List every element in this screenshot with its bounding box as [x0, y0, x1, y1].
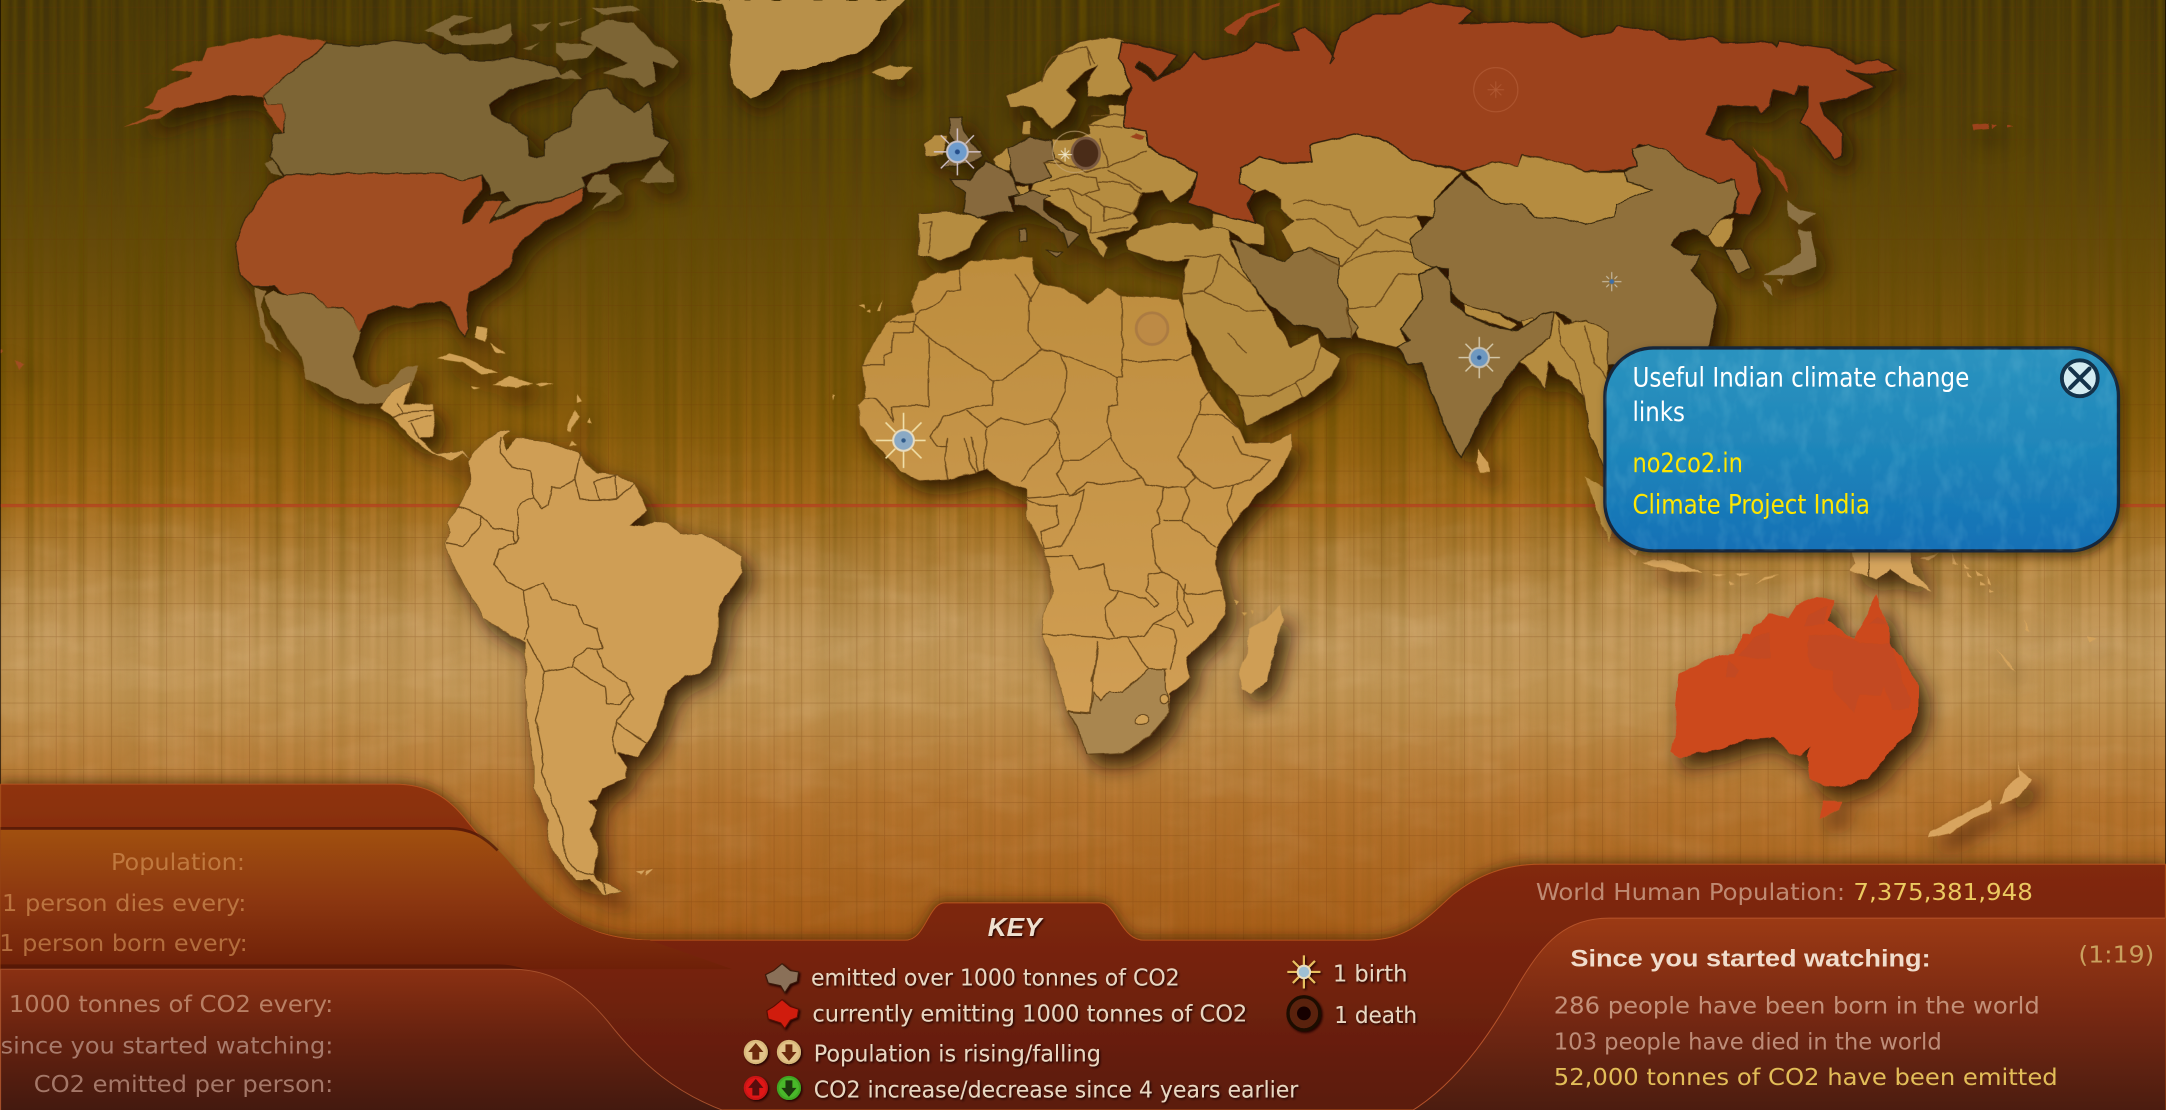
CO2 labels: CO2 emitted per person: [34, 1070, 333, 1098]
Tasmania [1820, 801, 1842, 818]
Russia [1119, 3, 1896, 224]
India [1398, 266, 1554, 457]
Sri Lanka [1476, 450, 1489, 472]
popup: Indian climate change links: links [1632, 398, 1685, 428]
birth marker: West Africa [876, 413, 926, 468]
European and Asian borders [923, 47, 1416, 397]
faded death marker: Egypt [1136, 313, 1168, 344]
Turkey and Arabia [1126, 223, 1340, 425]
key: emitted over 1000 tonnes: emitted over 1000 tonnes of CO2 [811, 964, 1180, 992]
Benelux and Denmark [992, 120, 1030, 195]
China [1410, 144, 1737, 367]
birth marker: India [1459, 337, 1500, 378]
bottom panel: background layer [1, 784, 2165, 1110]
right panel: world population: 7,375,381,948 [1853, 878, 2033, 906]
births count: 286 people have been born in the world [1554, 991, 2040, 1019]
Caucasus [1213, 213, 1265, 245]
France [950, 162, 1019, 218]
popup: Indian climate change links [1605, 348, 2118, 551]
popup heading: Useful Indian climate change [1632, 364, 1969, 394]
Iran [1231, 240, 1358, 338]
left panel: population [0, 828, 732, 969]
United Kingdom [943, 117, 983, 167]
world map [1, 0, 2097, 895]
South American borders [447, 438, 647, 893]
key: currently emitting: currently emitting 1000 tonnes of CO2 [812, 1000, 1247, 1028]
North America [1, 5, 679, 461]
right panel: world population: World Human Population: [1536, 878, 1845, 906]
deaths count: 103 people have died in the world [1554, 1027, 1942, 1055]
key: 1 birth: 1 birth [1333, 960, 1407, 988]
key: 1 death [1288, 997, 1417, 1030]
Australia dotted hot spots [1725, 606, 1910, 713]
birth marker: UK [934, 128, 981, 175]
Scandinavia [1006, 37, 1133, 130]
Eastern Europe [1028, 105, 1198, 258]
panel heading: Since you started watching: [1570, 945, 1931, 972]
South Africa [1069, 669, 1170, 755]
Ireland [923, 135, 948, 157]
Canadian islands [266, 5, 679, 209]
population labels: 1 person dies every: [2, 889, 246, 917]
Iberia [919, 212, 988, 260]
CO2 count: 52,000 tonnes of CO2 have been emitted [1554, 1063, 2058, 1091]
small islands near Africa [832, 300, 1254, 615]
popup: Indian climate change links: Climate Project India [1632, 491, 1870, 521]
Africa [832, 255, 1292, 755]
key heading: KEY [988, 912, 1044, 942]
Iceland [872, 65, 912, 80]
Central America [381, 382, 471, 461]
Southeast Asia [1519, 312, 1608, 476]
Australia [1670, 595, 1918, 786]
African borders [862, 271, 1270, 713]
Alaska [1, 35, 327, 370]
elapsed time: (1:19) [2078, 940, 2154, 968]
population labels: Population: [111, 848, 245, 876]
Indonesia and New Guinea [1629, 548, 2097, 671]
CO2 labels: since you started watching: [1, 1031, 333, 1059]
right panel: since you started watching [1409, 918, 2165, 1110]
population labels [0, 848, 248, 957]
birth marker: China [1602, 272, 1621, 291]
Madagascar [1239, 605, 1284, 693]
East Asia [1410, 144, 1815, 367]
Russian islands [1130, 1, 2014, 193]
Caribbean islands [437, 327, 592, 446]
Japan [1762, 200, 1815, 296]
South America outline [445, 430, 742, 895]
USA [235, 173, 585, 337]
Lesotho and Swaziland [1135, 695, 1168, 725]
Mongolia [1466, 155, 1652, 225]
faded marker: Russia [1474, 68, 1518, 112]
Europe and Western Asia [872, 37, 1461, 425]
Italy [1014, 190, 1079, 257]
Falkland Islands [635, 869, 654, 875]
death marker: Poland [1053, 131, 1100, 173]
Korea [1708, 218, 1735, 248]
key: 1 death: 1 death [1334, 1001, 1417, 1029]
popup links: no2co2.in [1632, 449, 1743, 479]
CO2 labels [1, 990, 333, 1098]
Greenland [691, 0, 905, 99]
Australia and Oceania [1629, 548, 2097, 838]
population labels: 1 person born every: [0, 929, 248, 957]
left panel: CO2 [1, 969, 725, 1110]
Mexico [255, 287, 419, 403]
right panel: world population [1536, 878, 2033, 906]
Nepal and Bhutan [1464, 305, 1536, 330]
key panel [745, 912, 1417, 1104]
key: 1 birth [1287, 955, 1407, 989]
key: population rising or falling: Population is rising/falling [814, 1040, 1101, 1068]
key: CO2 increase or decrease: CO2 increase/decrease since 4 years earlier [814, 1076, 1299, 1104]
South America [445, 430, 742, 895]
icon: close button [2062, 360, 2098, 396]
Germany [1008, 137, 1055, 185]
Kazakhstan and Central Asia [1240, 133, 1461, 347]
Africa outline [859, 255, 1292, 755]
Canada [262, 40, 670, 218]
New Zealand [1928, 760, 2033, 838]
CO2 labels: 1000 tonnes of CO2 every: [9, 990, 333, 1018]
